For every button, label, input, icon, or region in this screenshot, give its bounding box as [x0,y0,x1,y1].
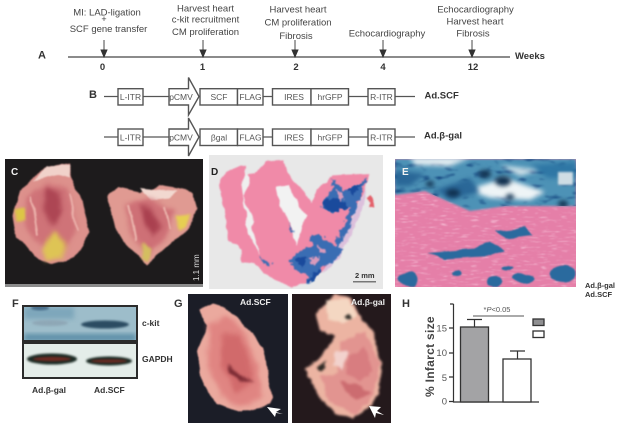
label Ad.beta-gal: Ad.β-gal [424,130,462,142]
panel H: infarct size bar chart [402,298,544,408]
timeline text: week 1: CM proliferation [172,27,239,38]
panel letter E: E [402,167,409,178]
y tick labels: 0 [442,396,447,408]
c-kit blot [23,306,137,341]
scale 1.1 mm: 1.1 mm [192,254,201,281]
pale stain gaps [309,189,344,266]
arrowhead marker [267,407,283,417]
construct Ad.SCF: SCF [210,92,228,102]
construct Ad.SCF: FLAG [239,92,262,102]
timeline text: week 12: Harvest heart [446,16,504,28]
y tick labels [436,324,447,408]
lane labels [32,385,125,395]
timeline axis [68,56,510,58]
GAPDH label: GAPDH [142,354,173,364]
white speckles in pink tissue [395,190,576,287]
timeline text: week 12 [437,4,514,40]
scale bar 2 mm: 2 mm [355,271,375,280]
week numbers: 0 [100,62,105,73]
right heart [105,186,197,265]
panel letter B: B [89,89,97,101]
timeline text: week 1: c-kit recruitment [172,14,240,26]
significance annotation [473,305,524,316]
blue beta-gal stain [260,178,368,283]
timeline text: week 4: Echocardiography [349,28,426,40]
panel B: vector constructs [89,78,462,156]
construct Ad.SCF: IRES [284,92,304,102]
ruler ticks [5,284,203,287]
timeline text: week 0: SCF gene transfer [70,24,147,35]
construct Ad.beta-gal: pCMV [169,132,193,142]
timeline text: week 1 [172,4,240,38]
construct Ad.SCF [104,78,415,115]
construct Ad.SCF: pCMV [169,92,193,102]
panel A: experimental timeline [38,4,545,73]
y axis [449,304,539,402]
timeline text: week 12: Echocardiography [437,4,514,16]
panel letter D: D [211,167,218,178]
construct Ad.beta-gal: R-ITR [370,132,393,142]
panel letter H: H [402,298,410,310]
panel letter C: C [11,167,18,178]
dark blue stain core [294,184,362,282]
bar Ad.beta-gal [460,320,488,402]
photo Ad.beta-gal [292,294,391,423]
panel letter F: F [12,298,19,310]
panel C: two heart photographs [5,159,203,287]
panel letter G: G [174,298,183,310]
timeline text: week 2 [264,4,332,42]
panel D: stained heart section [209,155,383,289]
tissue section [220,159,368,287]
construct Ad.beta-gal: hrGFP [317,132,343,142]
timeline text: week 1: Harvest heart [177,4,234,14]
construct Ad.beta-gal: L-ITR [120,132,141,142]
construct Ad.SCF: R-ITR [370,92,393,102]
photo Ad.SCF [188,294,288,423]
panel G: heart photos [174,294,391,423]
construct Ad.beta-gal [104,118,415,156]
lower blue patches [398,227,575,287]
GAPDH blot [23,343,137,378]
c-kit label: c-kit [142,318,160,328]
timeline text: week 0: + [101,14,107,24]
week numbers: 4 [380,62,386,73]
legend text for bar chart: Ad.β-gal [585,281,615,290]
timeline text: week 2: Harvest heart [269,4,327,16]
red tissue fragment [366,195,374,207]
legend text for bar chart [585,281,615,299]
Ad.SCF label: Ad.SCF [240,297,271,307]
upper blue region [395,159,576,211]
scale bar 2 mm [353,271,376,282]
lane labels: Ad.SCF [94,385,125,395]
legend swatches [533,319,544,338]
scale inset [558,172,573,185]
panel letter A: A [38,50,46,62]
timeline text: week 0 [70,8,147,35]
y axis title: % Infarct size [423,316,437,397]
arrows to timeline [101,40,475,57]
significance annotation: *P<0.05 [484,305,510,314]
y tick labels: 10 [436,348,447,359]
construct Ad.SCF: L-ITR [120,92,141,102]
construct Ad.beta-gal: βgal [211,132,227,142]
timeline text: week 2: CM proliferation [264,18,332,28]
week numbers [100,62,478,73]
label Ad.SCF: Ad.SCF [424,90,459,102]
arrowhead marker [369,406,384,418]
panel F: western blot [12,298,173,395]
week numbers: 2 [293,62,299,73]
construct Ad.SCF: hrGFP [317,92,343,102]
construct Ad.beta-gal: IRES [284,132,304,142]
weeks label: Weeks [515,51,545,62]
construct Ad.beta-gal: FLAG [239,132,262,142]
dark nuclei [426,170,568,208]
left heart [13,163,90,265]
Ad.beta-gal label: Ad.β-gal [351,297,385,307]
week numbers: 1 [200,62,206,73]
panel E: high magnification staining [395,158,576,287]
timeline text: week 2: Fibrosis [279,31,313,42]
bar Ad.SCF [503,351,531,402]
y tick labels: 5 [442,373,447,384]
legend text for bar chart: Ad.SCF [585,290,612,299]
lane labels: Ad.β-gal [32,385,66,395]
timeline text: week 0: MI: LAD-ligation [73,8,141,18]
y tick labels: 15 [436,324,447,334]
timeline text: week 12: Fibrosis [456,28,490,40]
week numbers: 12 [468,62,478,73]
